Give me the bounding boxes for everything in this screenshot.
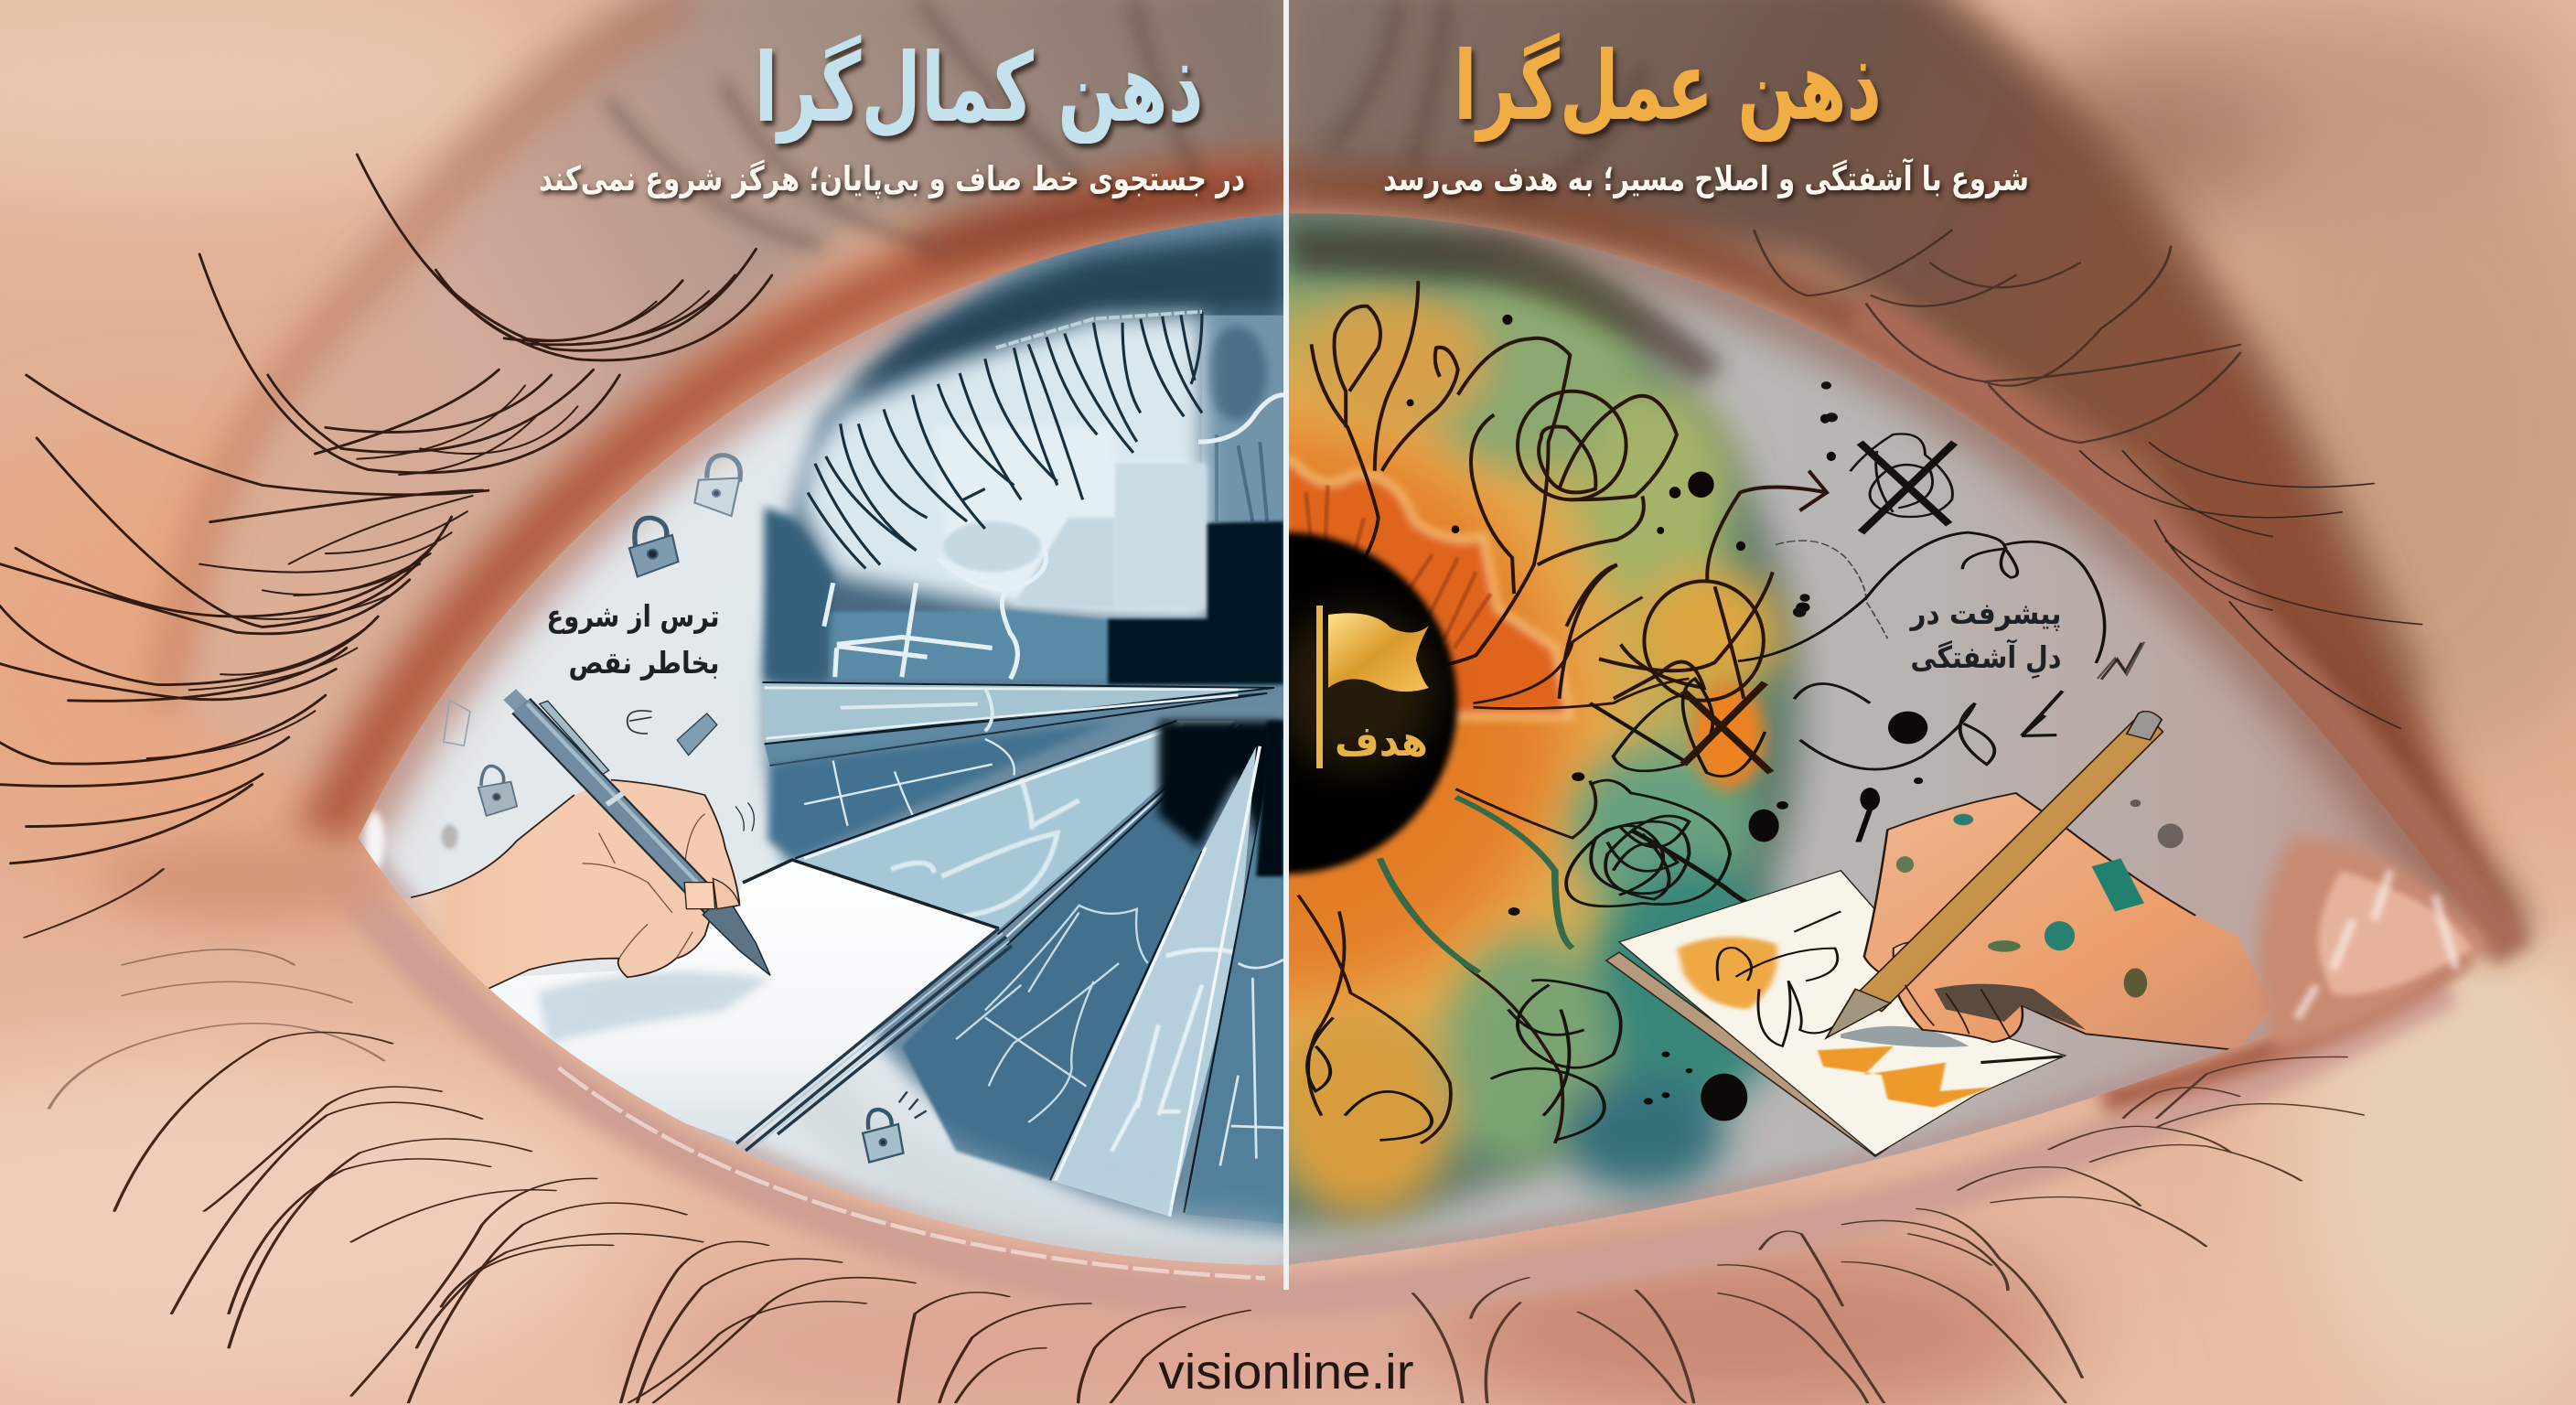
subtitle: action: شروع با آشفتگی و اصلاح مسیر؛ به هدف می‌رسد: [1383, 157, 2029, 198]
title: perfectionist mind: ذهن کمال‌گرا: [754, 32, 1204, 144]
pencil: [1855, 712, 2163, 1012]
faint smudge: [442, 825, 457, 849]
subtitle: perfectionist: در جستجوی خط صاف و بی‌پایان؛ هرگز شروع نمی‌کند: [539, 159, 1245, 198]
scribbles, ink blots and notebook on the right: [1307, 382, 2272, 1156]
knotted scribbles: [1307, 642, 2144, 1140]
eyelashes upper left: [0, 155, 772, 863]
eyelashes upper right: [1755, 231, 2422, 728]
right dark strip: [1186, 739, 1283, 1224]
callout: fear of starting: بخاطر نقص: [569, 645, 719, 681]
eyelashes lower right: [1413, 1056, 2363, 1403]
callout: fear of starting: ترس از شروع: [547, 598, 719, 635]
fade at iris lower edge: [772, 1051, 1286, 1265]
upper lid right: [1273, 0, 2497, 953]
icon: padlock top faint: [694, 456, 740, 516]
iris lashes: [808, 312, 1202, 568]
flag icon and goal label: [1316, 606, 1429, 768]
pale wedge: [795, 721, 1235, 929]
upper lid left: [173, 0, 1298, 821]
eyeball: [359, 213, 2481, 1265]
pupil right: [1115, 532, 1457, 874]
lower iris: fan of rays, veins and black centre: [768, 721, 1283, 1224]
icon: padlock lower: [478, 766, 517, 816]
icon: scribbled sign: [628, 711, 651, 734]
skin crease left: [165, 0, 690, 706]
callout: progress in chaos: [1909, 595, 2062, 679]
callout: progress in chaos: دلِ آشفتگی: [1910, 638, 2062, 679]
pen: [510, 694, 526, 711]
clean hand holding pen: [366, 694, 770, 992]
scribble stems upper iris: [1312, 281, 1827, 701]
soft blurred lashes on upper lid: [608, 0, 1643, 246]
pale long wedge: [1050, 746, 1256, 1217]
icon: padlock near bottom: [863, 1091, 927, 1163]
blank paper sheet: [476, 860, 1012, 1151]
eyelashes lower left: [25, 869, 1250, 1402]
icon: doodle tag faint: [444, 700, 470, 745]
white veins: [824, 395, 1283, 679]
lower waterline: [559, 1067, 1265, 1278]
skin crease right: [1905, 0, 2415, 690]
pale glass window: [800, 316, 1207, 619]
website watermark: visionline.ir: [1158, 1345, 1414, 1400]
lower block behind veins: [826, 610, 1115, 681]
painted hand holding pencil: [1826, 712, 2272, 1050]
goal label: هدف: [1335, 716, 1428, 766]
icon: padlock main: [629, 518, 679, 577]
flag: [1328, 613, 1429, 692]
callout: fear of starting: [547, 598, 719, 681]
black centre: [1159, 721, 1283, 851]
pupil dark stepped shape: [1108, 521, 1283, 684]
callout: progress in chaos: پیشرفت در: [1909, 595, 2062, 632]
terracotta eyelid rim: [320, 181, 1286, 846]
dark branching roots: [1298, 597, 1689, 1143]
icon: eraser: [677, 713, 717, 756]
notebook page: [1606, 871, 2066, 1156]
ink blots: [1508, 602, 2184, 1121]
inner eye corner: [2259, 838, 2489, 1051]
upper iris: window, lashes and veins: [763, 225, 1283, 766]
right iris slab: [1202, 316, 1283, 525]
sclera: [359, 213, 2481, 1265]
iris left half: perfectionist blue: [752, 214, 1283, 1265]
top ray bands: [763, 682, 1274, 744]
flag pole: [1316, 606, 1323, 768]
orange flame around pupil: [1281, 229, 1836, 717]
center divider line: [1283, 0, 1289, 1290]
dark veined wedge: [902, 721, 1239, 1180]
iris right half: action orange and green: [774, 202, 1836, 1228]
title: action mind: ذهن عمل‌گرا: [1454, 30, 1882, 142]
left side symbols and hand: [366, 456, 1012, 1163]
crossed out scribble, arrow and big loop: [1738, 382, 2141, 680]
motion marks by hand: [735, 802, 754, 831]
